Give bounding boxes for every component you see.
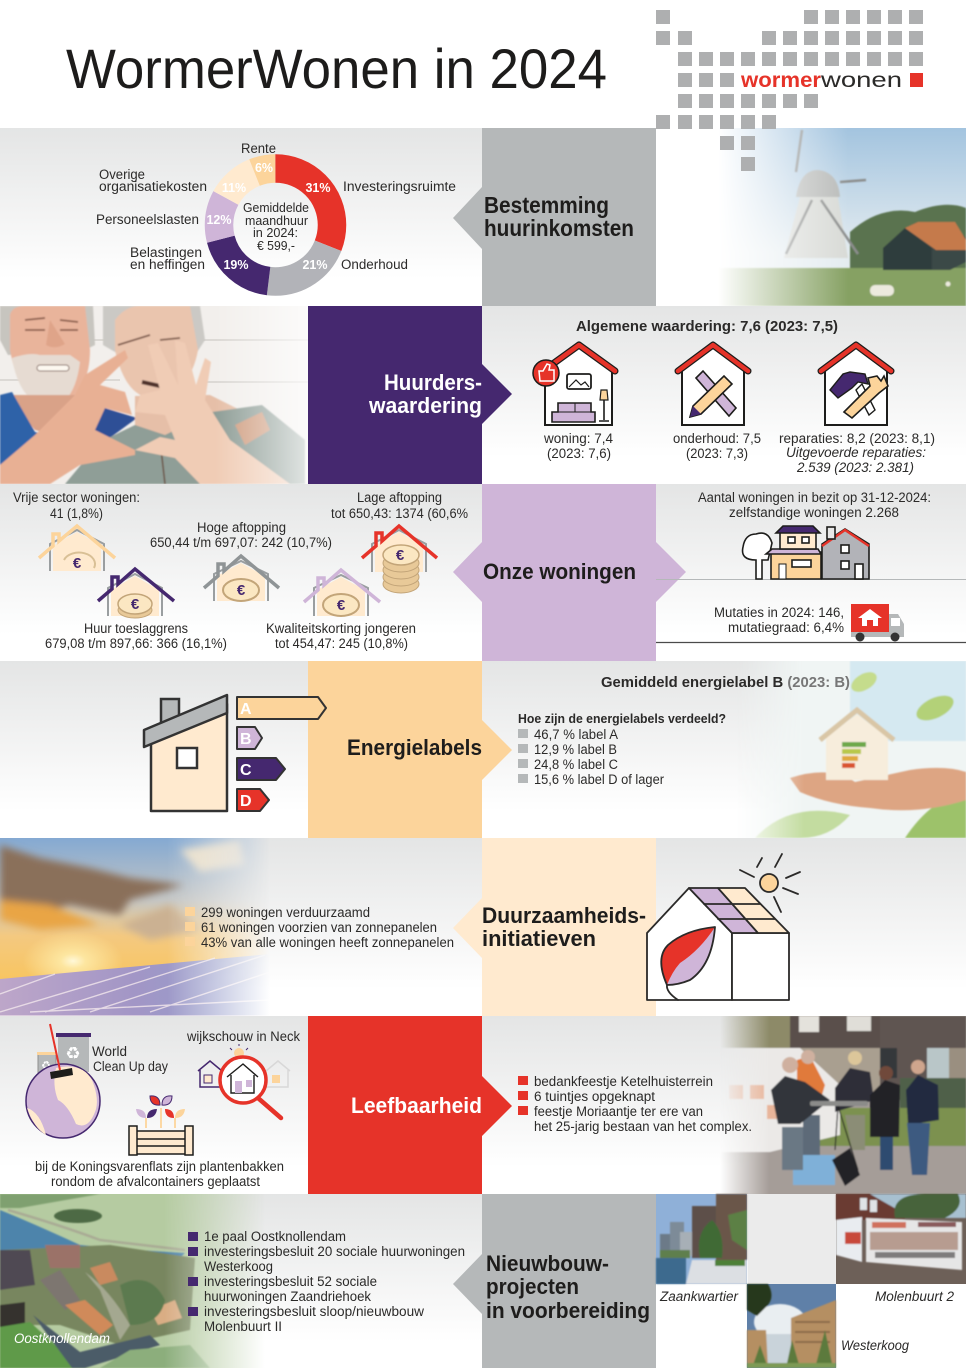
photo: sunset over solar panels <box>0 838 270 1016</box>
icon: house with solar roof, leaf and sun <box>647 854 800 1000</box>
text: aantal woningen: zelfstandige woningen 2.268 <box>729 505 899 520</box>
logo: grey squares with wordmark: wonen <box>820 69 902 92</box>
icon: houses and tree <box>743 526 869 579</box>
panel: energielabels: Energielabels <box>347 735 482 760</box>
text: onderhoud score <box>673 431 761 461</box>
energy label arrows: B <box>240 731 252 748</box>
panel: onze woningen <box>453 484 686 661</box>
donut chart: bestemming huurinkomsten: 19% <box>223 258 249 272</box>
donut chart: bestemming huurinkomsten: Rente <box>241 141 276 156</box>
panel: bestemming huurinkomsten: huurinkomsten <box>484 215 634 241</box>
house: hoge aftopping <box>204 556 279 601</box>
donut chart: bestemming huurinkomsten: maandhuur <box>245 213 309 228</box>
text: reparaties score: 2.539 (2023: 2.381) <box>796 460 914 475</box>
text: world clean up day: Clean Up day <box>93 1059 168 1074</box>
text: mutaties: mutatiegraad: 6,4% <box>728 620 844 635</box>
energy label arrows: C <box>240 762 252 779</box>
panel: huurderswaardering: Huurders- <box>384 370 482 395</box>
text: lage aftopping: tot 650,43: 1374 (60,6% <box>331 506 468 521</box>
house: lage aftopping with coin stack <box>362 526 437 593</box>
icon: recycling bins, broom and globe: ♻ <box>41 1060 51 1072</box>
donut chart: bestemming huurinkomsten <box>96 141 456 282</box>
text: world clean up day: World <box>92 1044 127 1059</box>
donut chart: bestemming huurinkomsten: 31% <box>305 181 331 195</box>
list: leefbaarheid: het 25-jarig bestaan van het complex. <box>534 1119 752 1134</box>
list: duurzaamheid <box>185 905 454 950</box>
donut chart: bestemming huurinkomsten: Belastingen <box>130 245 202 260</box>
text: aantal woningen: Aantal woningen in bezit op 31-12-2024: <box>698 490 931 505</box>
text: world clean up day <box>92 1044 168 1074</box>
donut chart: bestemming huurinkomsten: Personeelslasten <box>96 212 199 227</box>
panel: leefbaarheid: Leefbaarheid <box>351 1093 482 1118</box>
photo: Westerkoog <box>747 1284 836 1368</box>
donut chart: bestemming huurinkomsten: en heffingen <box>130 257 205 272</box>
house: kwaliteitskorting jongeren: € <box>337 597 346 614</box>
photo: hand holding small house <box>735 661 966 838</box>
list: nieuwbouw: investeringsbesluit 20 sociale huurwoningen <box>204 1244 465 1259</box>
text: woning score: (2023: 7,6) <box>547 446 611 461</box>
label: oostknollendam: Oostknollendam <box>14 1331 110 1346</box>
text: kwaliteitskorting jongeren: tot 454,47: 245 (10,8%) <box>275 636 408 651</box>
donut chart: bestemming huurinkomsten: Gemiddelde <box>243 200 309 215</box>
text: vrije sector woningen: Vrije sector woningen: <box>13 490 140 505</box>
photo: aerial view Oostknollendam <box>0 1194 265 1368</box>
text: vrije sector woningen <box>13 490 140 521</box>
list: duurzaamheid: 61 woningen voorzien van zonnepanelen <box>201 920 437 935</box>
photo: windmill landscape <box>724 128 966 306</box>
energy label house <box>144 695 227 811</box>
donut chart: bestemming huurinkomsten: € 599,- <box>257 238 295 253</box>
list: nieuwbouw <box>188 1229 465 1334</box>
list: leefbaarheid: 6 tuintjes opgeknapt <box>534 1089 655 1104</box>
photo: Molenbuurt 2 <box>836 1194 966 1284</box>
logo: grey squares with wordmark <box>656 10 923 171</box>
house: hoge aftopping: € <box>237 582 246 599</box>
title: WormerWonen in 2024 <box>66 37 607 100</box>
list: duurzaamheid: 43% van alle woningen heeft zonnepanelen <box>201 935 454 950</box>
photo: group of residents outside <box>720 1016 966 1194</box>
text: wijkschouw in Neck: wijkschouw in Neck <box>186 1029 300 1044</box>
panel: duurzaamheidsinitiatieven: initiatieven <box>482 926 596 951</box>
panel: huurderswaardering <box>308 306 512 484</box>
panel: nieuwbouwprojecten: projecten <box>486 1274 579 1299</box>
photo: Zaankwartier <box>656 1194 747 1284</box>
panel: bestemming huurinkomsten: Bestemming <box>484 192 609 218</box>
text: onderhoud score: (2023: 7,3) <box>686 446 748 461</box>
text: onderhoud score: onderhoud: 7,5 <box>673 431 761 446</box>
icon: house onderhoud <box>678 345 748 425</box>
donut chart: bestemming huurinkomsten: 21% <box>302 258 328 272</box>
list: energielabels verdeling: 12,9 % label B <box>534 742 617 757</box>
list: energielabels verdeling: 46,7 % label A <box>534 727 618 742</box>
text: koningsvarenflats <box>35 1159 284 1189</box>
icon: planter with seedlings <box>129 1096 193 1155</box>
list: leefbaarheid <box>518 1074 752 1134</box>
list: energielabels verdeling <box>518 711 726 787</box>
panel: duurzaamheidsinitiatieven <box>453 838 656 1016</box>
donut chart: bestemming huurinkomsten: Investeringsruimte <box>343 179 456 194</box>
panel: nieuwbouwprojecten: Nieuwbouw- <box>486 1251 609 1276</box>
text: huur toeslaggrens <box>45 621 227 651</box>
list: nieuwbouw: investeringsbesluit sloop/nieuwbouw <box>204 1304 424 1319</box>
text: woning score: woning: 7,4 <box>543 431 613 446</box>
icon: recycling bins, broom and globe <box>26 1024 100 1138</box>
text: hoge aftopping <box>150 520 332 550</box>
list: duurzaamheid: 299 woningen verduurzaamd <box>201 905 370 920</box>
icon: house reparaties <box>821 345 891 425</box>
energy label arrows: A <box>240 701 252 718</box>
list: nieuwbouw: Molenbuurt II <box>204 1319 282 1334</box>
energy label arrows <box>237 697 326 811</box>
text: koningsvarenflats: bij de Koningsvarenflats zijn plantenbakken <box>35 1159 284 1174</box>
donut chart: bestemming huurinkomsten: 11% <box>222 181 246 195</box>
list: energielabels verdeling: 24,8 % label C <box>534 757 618 772</box>
text: mutaties: Mutaties in 2024: 146, <box>714 605 844 620</box>
list: nieuwbouw: investeringsbesluit 52 sociale <box>204 1274 377 1289</box>
text: kwaliteitskorting jongeren: Kwaliteitskorting jongeren <box>266 621 416 636</box>
list: leefbaarheid: feestje Moriaantje ter ere van <box>534 1104 703 1119</box>
house: kwaliteitskorting jongeren <box>304 570 380 616</box>
donut chart: bestemming huurinkomsten: in 2024: <box>253 225 298 240</box>
panel: bestemming huurinkomsten <box>453 128 656 306</box>
panel: duurzaamheidsinitiatieven: Duurzaamheids- <box>482 903 646 928</box>
house: vrije sector <box>39 526 115 572</box>
text: reparaties score: Uitgevoerde reparaties: <box>786 445 926 460</box>
panel: onze woningen: Onze woningen <box>483 559 636 584</box>
donut chart: bestemming huurinkomsten: Onderhoud <box>341 257 408 272</box>
list: nieuwbouw: Westerkoog <box>204 1259 273 1274</box>
text: lage aftopping: Lage aftopping <box>357 490 442 505</box>
list: leefbaarheid: bedankfeestje Ketelhuisterrein <box>534 1074 713 1089</box>
house: vrije sector: € <box>73 555 82 572</box>
label: zaankwartier: Zaankwartier <box>659 1289 739 1304</box>
house: lage aftopping with coin stack: € <box>396 547 405 564</box>
text: kwaliteitskorting jongeren <box>266 621 416 651</box>
ground lines <box>656 580 966 642</box>
text: hoge aftopping: Hoge aftopping <box>197 520 286 535</box>
text: aantal woningen <box>698 490 931 520</box>
list: energielabels verdeling: 15,6 % label D of lager <box>534 772 664 787</box>
text: koningsvarenflats: rondom de afvalcontainers geplaatst <box>51 1174 260 1189</box>
icon: moving truck <box>851 604 904 642</box>
text: huur toeslaggrens: 679,08 t/m 897,66: 366 (16,1%) <box>45 636 227 651</box>
heading: gemiddeld energielabel: Gemiddeld energielabel B (2023: B) <box>601 675 850 691</box>
panel: energielabels <box>308 661 512 838</box>
text: reparaties score: reparaties: 8,2 (2023: 8,1) <box>779 431 935 446</box>
list: energielabels verdeling: Hoe zijn de energielabels verdeeld? <box>518 711 726 726</box>
text: hoge aftopping: 650,44 t/m 697,07: 242 (10,7%) <box>150 535 332 550</box>
donut chart: bestemming huurinkomsten: 6% <box>255 161 273 175</box>
label: molenbuurt 2: Molenbuurt 2 <box>875 1289 954 1304</box>
logo: grey squares with wordmark: wormer <box>740 69 821 92</box>
photo: couple making heart with hands <box>0 306 308 484</box>
panel: leefbaarheid <box>308 1016 512 1194</box>
panel: nieuwbouwprojecten <box>453 1194 656 1368</box>
grey filler tile <box>748 1194 836 1284</box>
donut chart: bestemming huurinkomsten: 12% <box>206 213 232 227</box>
text: vrije sector woningen: 41 (1,8%) <box>50 506 103 521</box>
donut chart: bestemming huurinkomsten: Overige <box>99 167 145 182</box>
text: huur toeslaggrens: Huur toeslaggrens <box>84 621 188 636</box>
icon: house woning <box>533 345 615 425</box>
panel: huurderswaardering: waardering <box>368 393 482 418</box>
text: reparaties score <box>779 431 935 475</box>
list: nieuwbouw: 1e paal Oostknollendam <box>204 1229 346 1244</box>
icon: houses under magnifying glass <box>198 1044 290 1118</box>
label: westerkoog: Westerkoog <box>841 1338 909 1353</box>
donut chart: bestemming huurinkomsten: organisatiekosten <box>99 179 207 194</box>
list: nieuwbouw: huurwoningen Zaandriehoek <box>204 1289 371 1304</box>
house: huur toeslaggrens <box>98 569 174 618</box>
panel: nieuwbouwprojecten: in voorbereiding <box>486 1298 650 1323</box>
icon: recycling bins, broom and globe: ♻ <box>65 1044 81 1063</box>
text: mutaties <box>714 605 844 635</box>
heading: algemene waardering: Algemene waardering: 7,6 (2023: 7,5) <box>576 319 838 335</box>
text: woning score <box>543 431 613 461</box>
house: huur toeslaggrens: € <box>131 596 140 613</box>
energy label arrows: D <box>240 793 252 810</box>
text: lage aftopping <box>331 490 468 521</box>
